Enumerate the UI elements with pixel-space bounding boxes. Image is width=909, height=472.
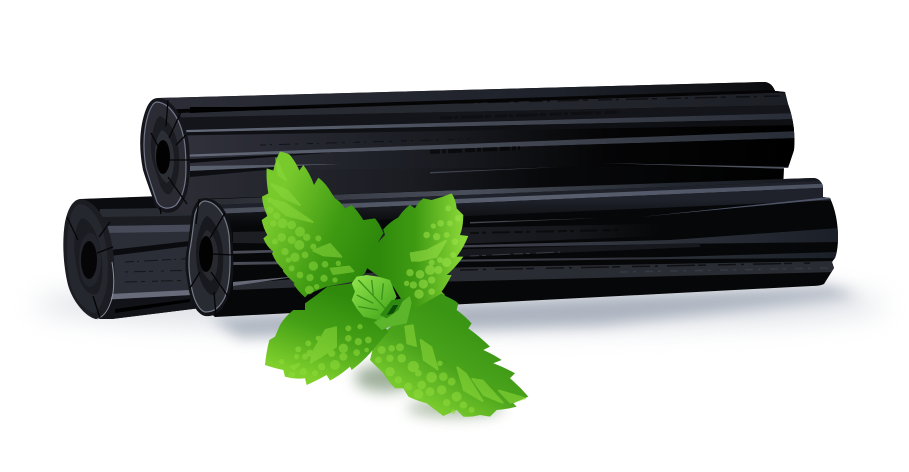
charcoal stick: left: [63, 196, 196, 320]
leaf: top-left: [262, 152, 383, 297]
charcoal stick: front: [186, 178, 838, 317]
charcoal stick: top: [140, 75, 800, 220]
sprout: center: [352, 275, 412, 330]
end face: left: [63, 199, 114, 319]
leaf: top-right: [365, 193, 468, 313]
leaf: bottom-left: [265, 283, 388, 385]
ground shadow: [35, 281, 885, 338]
mint sprig: [262, 152, 528, 417]
end face: top: [140, 98, 190, 214]
illustration: charcoal and mint: [43, 82, 877, 426]
end face: front: [185, 198, 233, 316]
leaf: bottom-right: [370, 293, 528, 417]
mint shadow: [355, 364, 503, 417]
